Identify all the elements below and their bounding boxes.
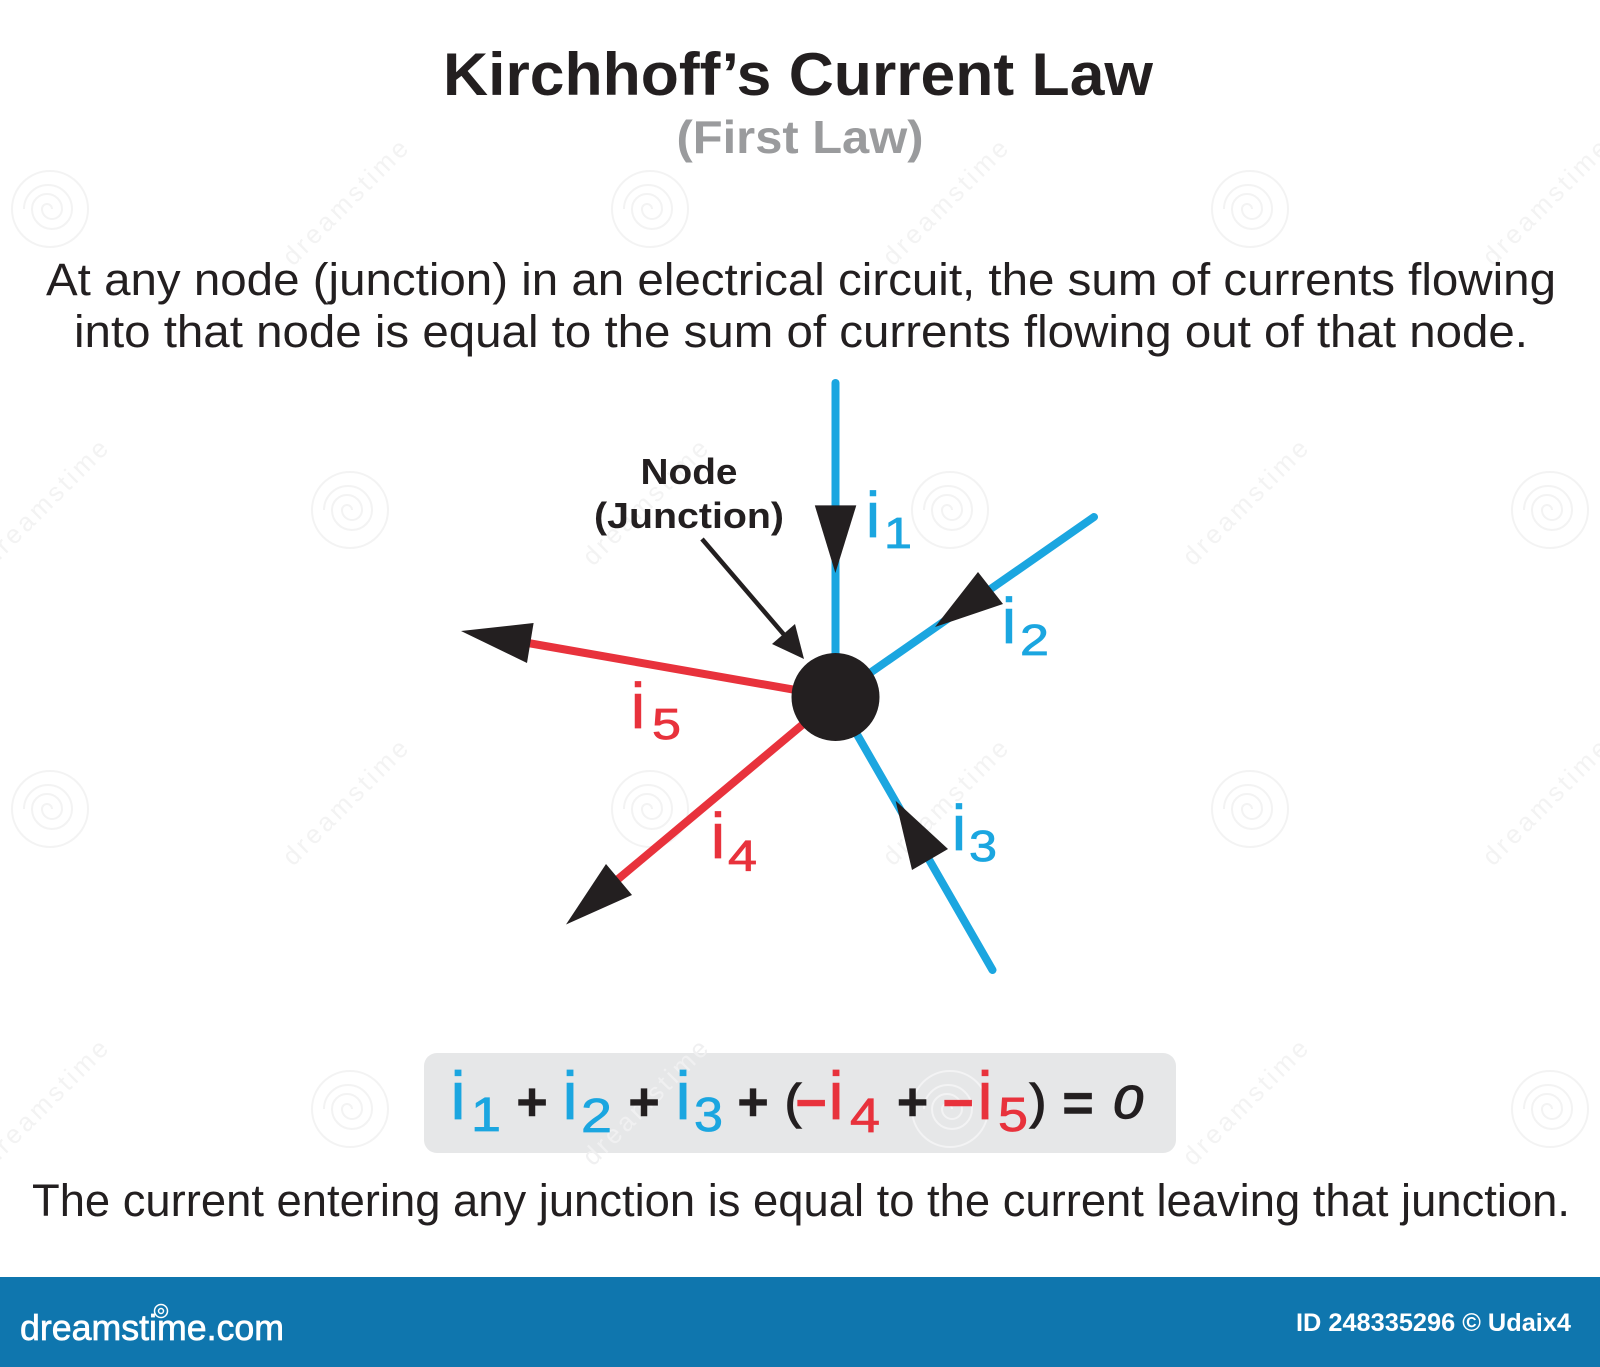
junction diagram — [461, 383, 1094, 970]
equation panel: dreamstime — [576, 1033, 714, 1171]
label i5: i — [631, 670, 645, 742]
law statement: At any node (junction) in an electrical circuit, the sum of currents flowing — [46, 254, 1556, 305]
label i2: 2 — [1020, 616, 1049, 665]
text: dreamstime — [876, 133, 1014, 271]
label i5 — [631, 670, 681, 749]
title: Kirchhoff’s Current Law — [443, 41, 1153, 108]
equation terms: 5 — [998, 1089, 1028, 1142]
label i1 — [866, 479, 912, 558]
footer image id: ID 248335296 © Udaix4 — [1296, 1309, 1571, 1337]
equation terms — [450, 1058, 1143, 1143]
equation terms: − — [795, 1073, 827, 1133]
equation terms: = — [1062, 1073, 1094, 1133]
logo spiral — [154, 1304, 168, 1318]
equation terms: i — [977, 1058, 993, 1134]
node label: Node — [640, 451, 738, 492]
node label — [594, 451, 784, 536]
label i5: 5 — [652, 700, 681, 749]
wire i2 incoming — [836, 517, 1094, 697]
equation terms: ) — [1030, 1076, 1046, 1129]
label i2: i — [1002, 585, 1016, 657]
equation terms: + — [516, 1072, 548, 1132]
label i4: i — [711, 800, 725, 872]
law statement — [46, 254, 1556, 357]
equation terms: 0 — [1113, 1076, 1143, 1128]
equation terms: i — [450, 1058, 466, 1134]
label i1: i — [866, 479, 880, 551]
wire i4 outgoing — [566, 697, 836, 924]
subtitle: (First Law) — [676, 111, 924, 163]
label i1: 1 — [884, 509, 912, 558]
equation terms: i — [562, 1058, 578, 1134]
equation panel — [424, 1033, 1176, 1171]
label i4 — [711, 800, 757, 881]
equation terms: + — [897, 1072, 928, 1132]
text: dreamstime — [276, 133, 414, 271]
equation terms: i — [675, 1058, 691, 1134]
wire i5 outgoing — [461, 623, 836, 697]
label i4: 4 — [728, 832, 757, 881]
node pointer arrow — [702, 539, 804, 659]
equation terms: 1 — [471, 1089, 501, 1142]
conclusion text: The current entering any junction is equal to the current leaving that junction. — [32, 1175, 1570, 1226]
text: dreamstime — [576, 433, 714, 571]
node dot — [792, 653, 880, 741]
footer band — [0, 1277, 1600, 1367]
law statement: into that node is equal to the sum of currents flowing out of that node. — [74, 306, 1528, 357]
equation terms: + — [737, 1072, 769, 1132]
equation terms: 2 — [581, 1090, 612, 1143]
wire i3 incoming — [836, 697, 992, 970]
text: dreamstime — [876, 733, 1014, 871]
label i3: i — [952, 792, 966, 864]
equation terms: + — [628, 1072, 660, 1132]
equation background — [424, 1053, 1176, 1153]
label i2 — [1002, 585, 1049, 665]
equation terms: i — [828, 1058, 844, 1134]
equation terms: − — [942, 1073, 974, 1133]
text: dreamstime — [1176, 433, 1314, 571]
label i3: 3 — [969, 822, 997, 871]
wire i1 incoming — [815, 383, 856, 690]
node label: (Junction) — [594, 495, 784, 536]
text: dreamstime — [1176, 1033, 1314, 1171]
equation terms: ( — [785, 1076, 801, 1129]
label i3 — [952, 792, 997, 871]
text: dreamstime — [276, 733, 414, 871]
footer logo: dreamstime.com — [20, 1307, 284, 1348]
equation terms: 3 — [694, 1089, 723, 1142]
equation terms: 4 — [850, 1090, 880, 1143]
